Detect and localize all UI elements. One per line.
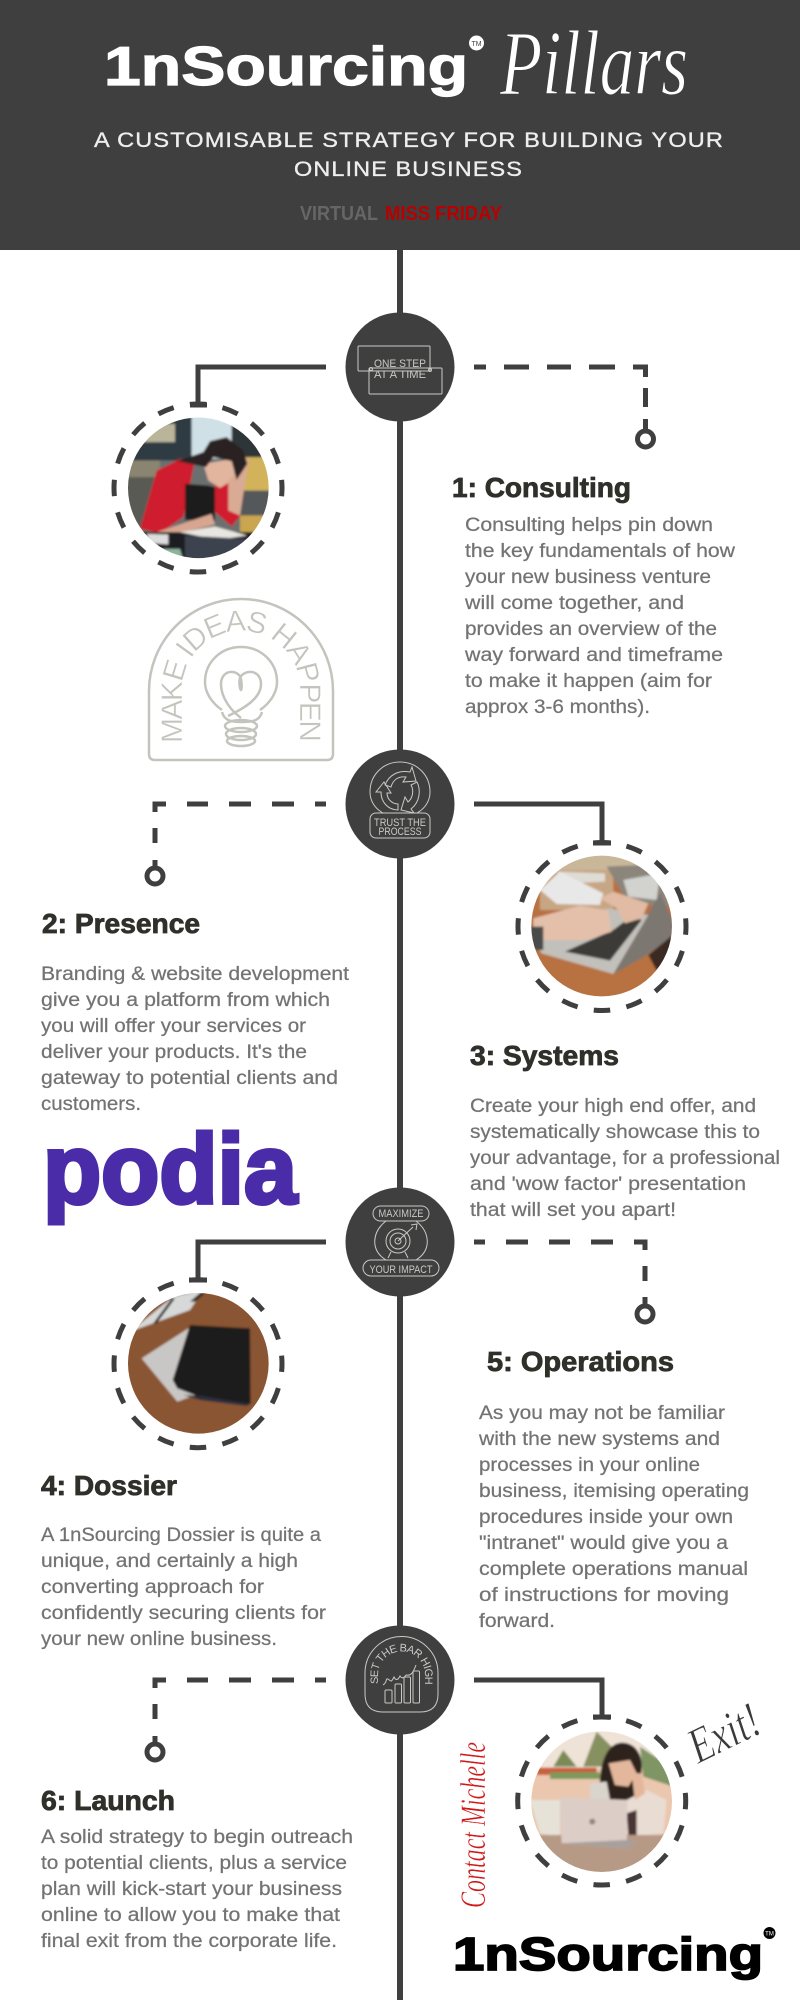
step 6 text: online to allow you to make that — [41, 1904, 341, 1926]
step 1 text: Consulting helps pin down — [465, 514, 713, 536]
step 1 text: way forward and timeframe — [464, 644, 723, 666]
brand line: Virtual Miss Friday — [300, 203, 503, 225]
step 6 text: A solid strategy to begin outreach — [41, 1826, 353, 1848]
node 3: maximize your impact: MAXIMIZE — [378, 1208, 424, 1220]
icon: light bulb with heart — [205, 647, 277, 746]
script note: Contact Michelle: Contact Michelle — [453, 1742, 493, 1908]
step 2 text: customers. — [41, 1093, 141, 1115]
step 2 text: gateway to potential clients and — [41, 1067, 338, 1089]
step 2 heading: 2: Presence — [42, 908, 200, 939]
subtitle: ONLINE BUSINESS — [294, 158, 523, 181]
step 1 text: your new business venture — [465, 566, 711, 588]
node 1: one step at a time — [346, 312, 454, 422]
step 6 text: plan will kick-start your business — [41, 1878, 342, 1900]
step 1 heading: 1: Consulting — [452, 472, 631, 503]
photo 6: woman with laptop outdoors — [518, 1717, 686, 1885]
step 4 text: your new online business. — [41, 1628, 277, 1650]
step 5 text: As you may not be familiar — [479, 1402, 726, 1424]
step 1 text: will come together, and — [464, 592, 684, 614]
step 2 text: Branding & website development — [41, 963, 350, 985]
connector: node 2 to photo — [474, 804, 611, 843]
step 3 text: that will set you apart! — [470, 1199, 676, 1221]
step 5 text: forward. — [479, 1610, 555, 1632]
step 5 text: business, itemising operating — [479, 1480, 749, 1502]
step 5 text: processes in your online — [479, 1454, 700, 1476]
connector: node 4 to step 6 — [147, 1680, 326, 1760]
photo 4: laptop and black sleeve on wood — [114, 1280, 282, 1448]
brand line: Virtual Miss Friday: VIRTUAL — [300, 203, 378, 225]
node 4: set the bar high — [346, 1626, 454, 1734]
step 4 text: confidently securing clients for — [41, 1602, 327, 1624]
badge: make ideas happen: MAKE IDEAS HAPPEN — [162, 610, 320, 740]
connector: node 1 to step 1 — [474, 367, 654, 447]
step 5 text: of instructions for moving — [479, 1584, 729, 1606]
timeline spine — [397, 250, 403, 2000]
step 1 text: to make it happen (aim for — [465, 670, 713, 692]
step 3 text: your advantage, for a professional — [470, 1147, 780, 1169]
step 6 heading: 6: Launch — [41, 1785, 175, 1816]
photo 3: hands typing on a laptop — [518, 842, 686, 1010]
step 5 heading: 5: Operations — [487, 1346, 674, 1377]
title: 1nSourcing: 1nSourcing — [104, 35, 468, 97]
node 1: one step at a time: ONE STEP — [374, 358, 426, 370]
node 3: maximize your impact: YOUR IMPACT — [370, 1264, 433, 1276]
node 2: trust the process: PROCESS — [378, 826, 422, 838]
subtitle — [94, 129, 724, 181]
step 4 text: A 1nSourcing Dossier is quite a — [41, 1524, 321, 1546]
script note: Exit!: Exit! — [678, 1691, 769, 1774]
step 4 text — [41, 1524, 327, 1650]
step 5 text: with the new systems and — [478, 1428, 720, 1450]
connector: node 3 to step 5 — [474, 1242, 653, 1322]
connector: node 3 to photo — [189, 1242, 326, 1280]
brand line: Virtual Miss Friday: MISS FRIDAY — [385, 203, 503, 225]
subtitle: A CUSTOMISABLE STRATEGY FOR BUILDING YOUR — [94, 129, 724, 152]
trademark badge — [764, 1927, 776, 1939]
step 4 heading: 4: Dossier — [41, 1470, 177, 1501]
step 3 text: systematically showcase this to — [470, 1121, 760, 1143]
connector: node 4 to photo — [474, 1680, 611, 1717]
step 5 text: "intranet" would give you a — [479, 1532, 728, 1554]
step 1 text: the key fundamentals of how — [465, 540, 736, 562]
step 1 text: provides an overview of the — [465, 618, 717, 640]
step 3 text: and 'wow factor' presentation — [470, 1173, 746, 1195]
step 4 text: converting approach for — [41, 1576, 265, 1598]
step 2 text: give you a platform from which — [41, 989, 330, 1011]
step 3 text — [470, 1095, 780, 1221]
trademark badge: TM — [765, 1932, 774, 1938]
step 4 text: unique, and certainly a high — [41, 1550, 298, 1572]
title script: Pillars: Pillars — [499, 12, 688, 114]
step 3 heading: 3: Systems — [470, 1040, 619, 1071]
step 5 text: complete operations manual — [479, 1558, 748, 1580]
connector: node 1 to photo — [190, 367, 326, 405]
connector: node 2 to step 2 — [147, 804, 326, 884]
step 2 text — [41, 963, 350, 1115]
step 5 text — [478, 1402, 749, 1632]
step 6 text: to potential clients, plus a service — [41, 1852, 347, 1874]
node 2: trust the process — [346, 750, 454, 858]
node 1: one step at a time: AT A TIME — [374, 369, 426, 381]
node 2: trust the process: TRUST THE — [374, 817, 426, 829]
step 5 text: procedures inside your own — [479, 1506, 733, 1528]
step 6 text — [41, 1826, 353, 1952]
step 2 text: you will offer your services or — [41, 1015, 307, 1037]
step 3 text: Create your high end offer, and — [470, 1095, 756, 1117]
step 1 text — [464, 514, 736, 718]
step 2 text: deliver your products. It's the — [41, 1041, 307, 1063]
node 4: set the bar high: SET THE BAR HIGH — [370, 1644, 433, 1684]
header band — [0, 0, 800, 250]
trademark badge: TM — [471, 41, 482, 48]
trademark badge — [469, 36, 484, 50]
node 3: maximize your impact — [346, 1188, 454, 1296]
logo: podia: podia — [43, 1114, 298, 1224]
step 6 text: final exit from the corporate life. — [41, 1930, 337, 1952]
footer logo: 1nSourcing: 1nSourcing — [453, 1928, 763, 1980]
photo 1: woman in red jacket — [114, 404, 282, 572]
step 1 text: approx 3-6 months). — [465, 696, 650, 718]
